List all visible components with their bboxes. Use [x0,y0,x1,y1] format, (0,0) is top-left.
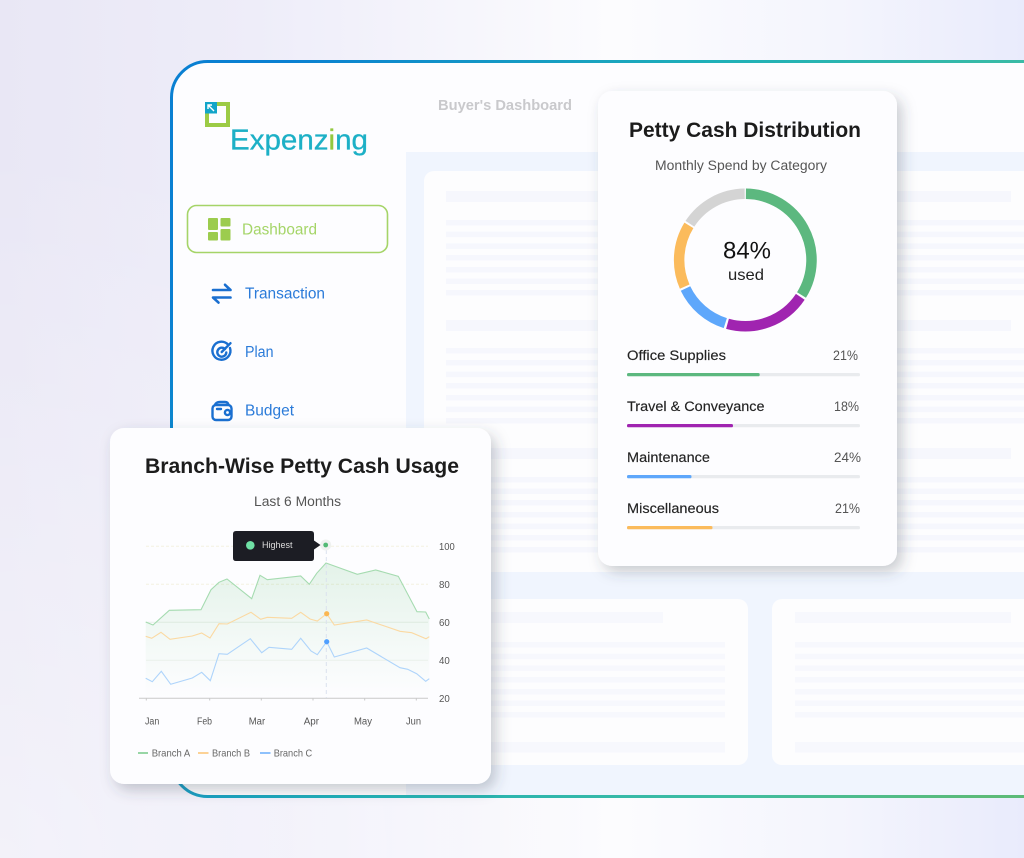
nav item: Dashboard [188,206,388,252]
y axis labels: 80 [439,579,450,591]
nav item: Dashboard: Dashboard [242,222,317,238]
line: branch B [146,612,429,639]
logo: Expenzing [205,102,368,156]
donut value: 84% [723,238,771,264]
x axis labels: Jan [145,716,159,728]
legend: Branch A [152,748,190,760]
line: branch A [146,563,429,625]
nav item: Budget: Budget [245,402,295,420]
legend [138,748,312,760]
panel: branch-wise usage [110,428,491,784]
area: branch A fill [146,563,429,698]
icon: target [212,342,230,360]
donut caption: used [728,267,764,284]
category: Office Supplies [627,347,860,376]
x axis labels: Mar [249,716,266,728]
y axis labels: 20 [439,693,450,705]
nav item: Plan: Plan [245,344,274,361]
logo: Expenzing: Expenzing [230,124,368,156]
icon: wallet [212,402,232,420]
heading: Buyer's Dashboard: Buyer's Dashboard [438,97,572,114]
category: Office Supplies: 21% [833,347,858,363]
icon: transfer arrows [213,285,230,303]
subtitle: Last 6 Months [254,494,341,510]
tooltip: Highest: Highest [262,540,293,551]
x axis labels: May [354,716,372,728]
panel: lower left card [491,599,748,765]
nav item: Transaction: Transaction [245,286,325,302]
donut chart [679,194,812,326]
y axis labels: 60 [439,617,450,629]
category: Office Supplies: Office Supplies [627,348,726,364]
nav item: Budget [212,402,295,420]
category: Maintenance: 24% [834,449,861,465]
category: Travel & Conveyance: Travel & Conveyance [627,399,765,415]
category: Maintenance [627,449,861,478]
marker: branch B [324,611,329,616]
marker: highest point [320,540,331,550]
category: Miscellaneous [627,500,860,529]
x axis labels: Apr [304,716,320,728]
category: Miscellaneous: 21% [835,500,860,516]
x axis labels: Feb [197,716,212,728]
line chart [139,531,455,728]
panel: lower right card [772,599,1024,765]
title: Branch-Wise Petty Cash Usage [145,454,459,478]
x axis labels: Jun [406,716,421,728]
tooltip: Highest [233,531,320,561]
y axis labels: 40 [439,655,450,667]
title: Petty Cash Distribution [629,118,861,142]
category: Maintenance: Maintenance [627,450,710,466]
category: Travel & Conveyance: 18% [834,398,859,414]
line: branch C [146,638,429,684]
x axis labels [145,716,421,728]
legend: Branch B [212,748,250,760]
icon: dashboard grid [208,218,230,240]
marker: branch C [324,639,329,644]
highlight guide [325,550,327,698]
panel: dashboard window [172,62,1024,798]
nav item: Transaction [213,285,325,303]
y axis labels: 100 [439,541,455,553]
nav item: Plan [212,342,274,361]
panel: petty cash distribution [598,91,897,566]
category: Miscellaneous: Miscellaneous [627,501,719,517]
category: Travel & Conveyance [627,398,860,427]
subtitle: Monthly Spend by Category [655,158,828,174]
panel: content area background [406,152,1024,798]
x axis [139,698,428,700]
panel: main content card [424,171,1024,572]
y axis labels [439,541,455,705]
legend: Branch C [274,748,312,760]
